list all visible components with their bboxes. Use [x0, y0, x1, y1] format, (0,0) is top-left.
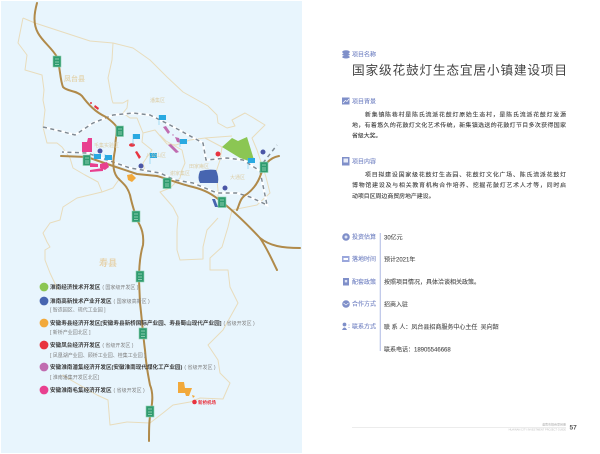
icon: bookmark: [342, 157, 350, 166]
text block: content paragraph: 动项目区周边商贸房地产建设。: [352, 192, 434, 200]
legend item: purple: [ 淮南潘集开发区北区]: [50, 374, 100, 381]
row: cooperation mode: 合作方式: [352, 300, 376, 308]
panel: map background: [1, 1, 302, 453]
zone: blue high-tech area: [198, 170, 218, 183]
legend item: orange: [ 新桥产业园北区 ]: [50, 329, 91, 336]
map: place names: 凤台县: [64, 74, 85, 83]
map: place names: 田家庵区: [189, 163, 209, 170]
row: investment estimate: 30亿元: [384, 234, 403, 242]
map: development zones: [82, 102, 255, 398]
map: place names: [64, 74, 245, 268]
row: landing time: 预计2021年: [384, 256, 415, 264]
row: supporting policy: 配套政策: [352, 278, 376, 286]
map: highway shields: [53, 56, 268, 417]
map: place names: 大通区: [230, 174, 245, 181]
map: railway dashed lines: [43, 113, 277, 205]
legend item: purple: [40, 363, 216, 381]
zone: orange Shouxian area: [127, 174, 136, 182]
legend item: blue: 淮南高新技术产业开发区 ( 国家级高新区 ): [50, 297, 150, 305]
map: Xinqiao airport marker: 新桥机场: [198, 399, 216, 406]
icon: chart card: [342, 98, 350, 104]
zone: red Fengtai areas: [90, 102, 141, 159]
page number: 57: [570, 424, 577, 432]
zone: pink Maoji area: [82, 138, 109, 172]
row: investment estimate: 投资估算: [352, 233, 376, 241]
map: location flags: [94, 115, 255, 169]
legend item: blue: [ 智造园区、现代工业园 ]: [50, 306, 106, 314]
row: contact: 联系电话：18905546668: [384, 346, 451, 354]
text block: background paragraph: 省级大奖。: [352, 132, 381, 140]
footer: guide name: 淮南市招商项目册: [542, 422, 566, 426]
text block: content paragraph: [352, 170, 566, 200]
row: contact: 联系方式: [352, 322, 376, 330]
zone: purple Panji area: [163, 126, 181, 153]
map: place names: 谢家集区: [170, 170, 190, 177]
section: project name: [342, 50, 567, 78]
legend item: purple: 安徽淮南潘集经济开发区(安徽淮南现代煤化工产业园) ( 省级开发区 ): [50, 363, 216, 371]
map: place names: 毛集实验区: [94, 142, 119, 149]
zone: green national development area: [222, 137, 255, 163]
legend item: green: 淮南经济技术开发区 ( 国家级开发区 ): [50, 283, 139, 291]
divider: vertical line: [379, 233, 382, 351]
row: cooperation mode: [342, 300, 408, 308]
heading: project name label: 项目名称: [352, 50, 376, 58]
heading: project background: 项目背景: [352, 98, 376, 106]
section: project details: [342, 233, 499, 354]
icon: stacked layers: [342, 50, 350, 58]
row: supporting policy: 按照项目情况，具体洽谈相关政策。: [384, 278, 480, 286]
row: supporting policy: [343, 278, 480, 286]
footer: [352, 422, 577, 432]
section: project content: [342, 157, 566, 200]
legend item: pink: [40, 386, 145, 394]
legend item: green: [40, 283, 139, 291]
zone: orange Xinqiao area: [178, 382, 195, 398]
legend item: orange: 安徽寿县经济开发区[安徽寿县新桥国际产业园、寿县蜀山现代产业园] ( 省级开发区 ): [50, 319, 255, 327]
heading: project content: 项目内容: [352, 158, 376, 166]
legend item: red: 安徽凤台经济开发区 ( 省级开发区 ): [50, 341, 134, 349]
row: landing time: [342, 255, 415, 264]
legend item: blue: [40, 297, 150, 314]
section: project background: [342, 98, 566, 140]
text block: background paragraph: 地，有着悠久的花鼓灯文化艺术传统，新集镇选送的花鼓灯节目多次获得国家: [352, 121, 566, 129]
row: investment estimate: [342, 233, 403, 242]
map: place names: 潘集区: [150, 97, 165, 104]
legend item: pink: 安徽淮南毛集经济开发区 ( 省级开发区 ): [50, 386, 145, 394]
map: highways: [34, 3, 300, 441]
row: contact: [342, 322, 499, 354]
legend item: red: [ 凤凰湖产业园、顾桥工业园、桂集工业园 ]: [50, 352, 146, 359]
legend item: orange: [40, 319, 255, 336]
text block: background paragraph: [352, 110, 566, 140]
footer: English guide name: HUAINAN CITY INVESTMENT PROJECT GUIDE: [509, 428, 566, 432]
map: Xinqiao airport marker: [192, 399, 216, 406]
map: place names: 寿县: [99, 257, 117, 268]
legend: [40, 283, 255, 394]
text block: content paragraph: 项目拟建设国家级花鼓灯生态园、花鼓灯文化广场、陈氏流派花鼓灯: [365, 170, 566, 178]
text block: content paragraph: 博物馆建设及与相关教育机构合作培养、挖掘花鼓灯艺术人才等，同时启: [352, 181, 566, 189]
zone: small blue area: [212, 199, 218, 207]
row: landing time: 落地时间: [352, 255, 376, 263]
text block: background paragraph: 新集镇陈巷村是陈氏流派花鼓灯原始生态村，是陈氏流派花鼓灯发源: [365, 110, 566, 118]
row: cooperation mode: 招商入驻: [384, 300, 408, 308]
title: 国家级花鼓灯生态宜居小镇建设项目: [352, 62, 567, 78]
legend item: red: [40, 341, 146, 359]
map: circular markers: [98, 148, 266, 190]
map: place names: 八公山区: [146, 152, 166, 159]
row: contact: 联 系 人：凤台县招商服务中心主任 吴向韶: [384, 323, 499, 331]
map: district boundaries: [18, 18, 270, 425]
